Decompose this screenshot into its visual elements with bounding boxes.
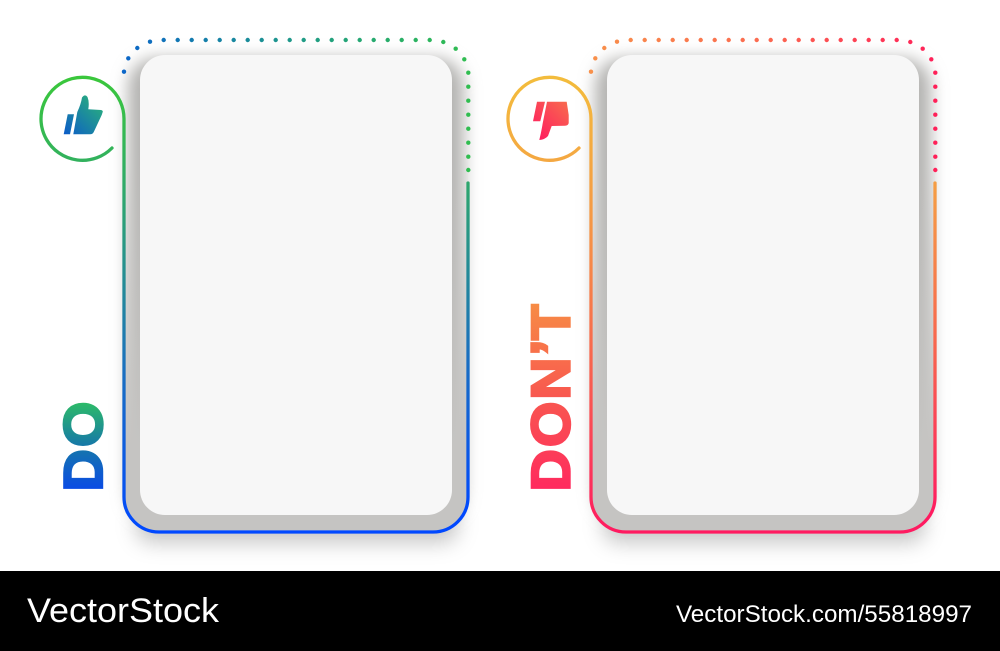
label: DON'T: DON’T (521, 304, 582, 491)
dotted border: do panel (122, 38, 471, 172)
drop shadow: do panel (136, 505, 458, 543)
dotted border: don't panel (589, 38, 938, 172)
backing shadow: do card (128, 58, 464, 520)
outline: do panel with icon ring (41, 77, 468, 532)
footer logo text: VectorStock (27, 592, 220, 630)
backing band: don't card (591, 150, 935, 532)
card: don't content (607, 55, 919, 515)
icon: thumbs down (533, 102, 569, 140)
drop shadow: don't panel (603, 505, 925, 543)
footer image id: VectorStock.com/55818997 (676, 601, 972, 628)
outline: don't panel with icon ring (508, 77, 935, 532)
panel: do (41, 38, 470, 543)
icon: thumbs up (64, 95, 103, 134)
label: DO: DO (54, 402, 115, 491)
backing band: do card (124, 150, 468, 532)
footer bar (0, 571, 1000, 651)
card: do content (140, 55, 452, 515)
backing shadow: don't card (595, 58, 931, 520)
panel: don't (508, 38, 938, 543)
